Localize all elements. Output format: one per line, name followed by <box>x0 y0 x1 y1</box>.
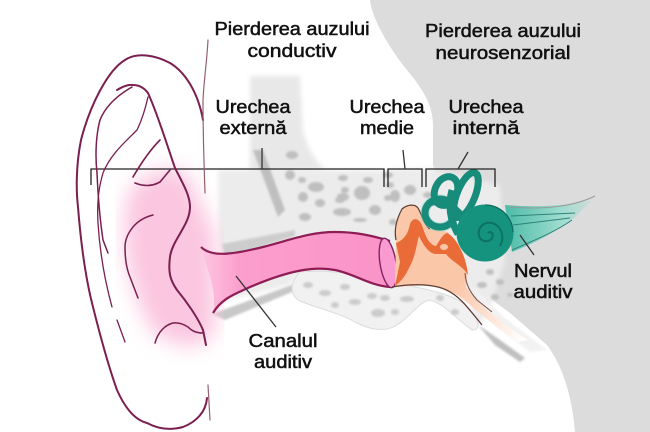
middle ear <box>392 205 528 342</box>
pink ear glow <box>125 169 215 348</box>
brackets <box>91 169 495 187</box>
text: neurosenzorial <box>436 43 570 63</box>
text: medie <box>360 118 414 138</box>
text: auditiv <box>254 352 312 372</box>
label: inner ear: Urechea <box>448 97 525 117</box>
inner ear: cochlea and semicircular canals <box>425 169 514 262</box>
text: internă <box>452 118 521 138</box>
heading: sensorineural hearing loss: Pierderea auzului <box>425 21 581 41</box>
label: middle ear: Urechea <box>350 97 426 117</box>
temporal bone <box>212 76 547 362</box>
text: externă <box>220 118 288 138</box>
grey head background <box>370 0 650 432</box>
ear outline <box>77 40 210 429</box>
text: auditiv <box>514 282 572 302</box>
text: conductiv <box>248 41 336 61</box>
heading: conductive hearing loss: Pierderea auzului <box>214 19 370 39</box>
pointer lines <box>236 148 534 327</box>
ear canal <box>201 232 400 313</box>
auditory nerve <box>505 196 595 252</box>
lower bone <box>292 271 478 330</box>
label: ear canal: Canalul <box>248 331 318 351</box>
label: outer ear: Urechea <box>216 97 292 117</box>
label: auditory nerve: Nervul <box>514 261 572 281</box>
